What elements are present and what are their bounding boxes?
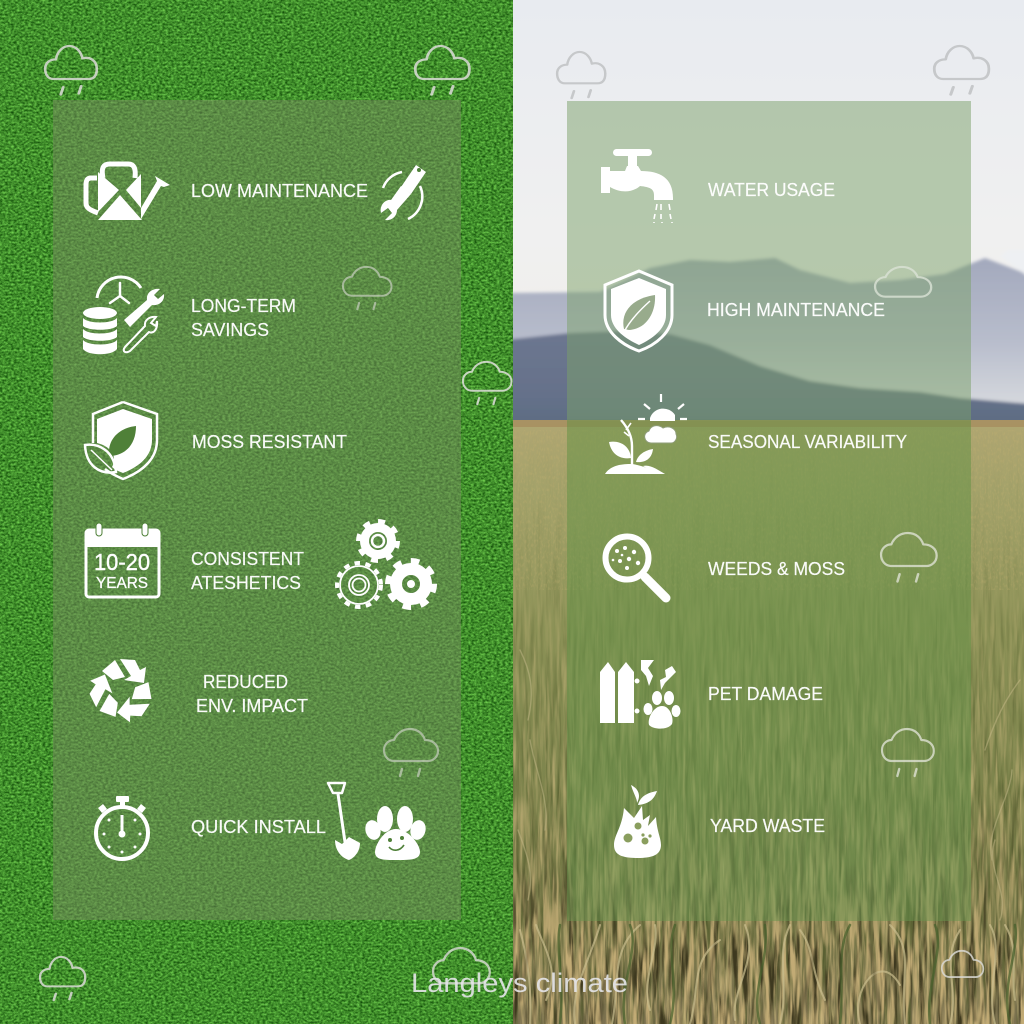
icon: cloud by weeds and moss	[881, 533, 937, 581]
panel: left, synthetic turf benefits	[53, 100, 461, 920]
caption: Langleys climate: Langleys climate	[411, 968, 628, 998]
text: low maintenance: LOW MAINTENANCE	[191, 180, 368, 201]
icon: cloud bottom-right	[942, 951, 983, 977]
icon: cloud top-right sky 2	[934, 46, 989, 94]
text: reduced env impact	[196, 671, 308, 716]
icon: watering can	[86, 164, 170, 220]
text: weeds and moss: WEEDS & MOSS	[708, 558, 845, 579]
icon: stopwatch	[96, 796, 148, 859]
icon: cloud at panel edge	[463, 362, 512, 404]
icon: cloud top-right sky 1	[557, 52, 605, 98]
icon: seedling with sun and cloud	[605, 394, 687, 474]
icon: cloud bottom-centre	[433, 948, 490, 983]
icon: cloud by yard waste	[882, 729, 934, 776]
text: long-term savings: SAVINGS	[191, 319, 269, 340]
icon: three gears	[337, 522, 434, 607]
text: quick install: QUICK INSTALL	[191, 816, 326, 837]
text: consistent aesthetics: CONSISTENT	[191, 548, 304, 569]
icon: cloud bottom-left	[40, 957, 85, 1000]
background: artificial turf (left half)	[0, 0, 513, 1024]
text: consistent aesthetics: ATESHETICS	[191, 572, 301, 593]
icon: cloud top-left	[45, 46, 97, 94]
text: water usage: WATER USAGE	[708, 179, 835, 200]
text: high maintenance: HIGH MAINTENANCE	[707, 299, 885, 320]
icon: yard waste bag	[614, 785, 661, 858]
text: pet damage: PET DAMAGE	[708, 683, 823, 704]
text: yard waste: YARD WASTE	[710, 815, 825, 836]
icon: magnifier with moss	[606, 536, 666, 598]
icon: calendar 10-20 years: 10-20	[94, 549, 150, 575]
panel: right, natural lawn drawbacks	[567, 101, 971, 921]
text: reduced env impact: REDUCED	[203, 671, 288, 692]
text: long-term savings	[191, 295, 296, 340]
icon: clock, coins and wrenches	[83, 277, 164, 354]
icon: moss shield	[85, 402, 157, 479]
icon: cloud by high maintenance	[875, 267, 931, 297]
icon: recycling arrows	[83, 659, 159, 726]
text: long-term savings: LONG-TERM	[191, 295, 296, 316]
icon: cloud in left panel	[343, 267, 392, 309]
text: moss resistant: MOSS RESISTANT	[192, 431, 347, 452]
icon: wrench with arc	[381, 165, 426, 220]
icon: shovel	[328, 783, 360, 860]
icon: dripping faucet	[601, 149, 673, 223]
icon: cloud top-centre-left	[415, 46, 469, 94]
icon: fence and paw damage	[600, 660, 680, 729]
text: reduced env impact: ENV. IMPACT	[196, 695, 308, 716]
icon: smiling paw	[363, 806, 428, 860]
icon: shield with leaf	[605, 271, 672, 351]
background: natural landscape (right half)	[505, 0, 1024, 1024]
text: seasonal variability: SEASONAL VARIABILITY	[708, 431, 907, 452]
text: consistent aesthetics	[191, 548, 304, 593]
icon: calendar 10-20 years: YEARS	[96, 575, 148, 592]
icon: calendar 10-20 years	[86, 523, 160, 597]
icon: cloud above paw	[384, 729, 438, 776]
